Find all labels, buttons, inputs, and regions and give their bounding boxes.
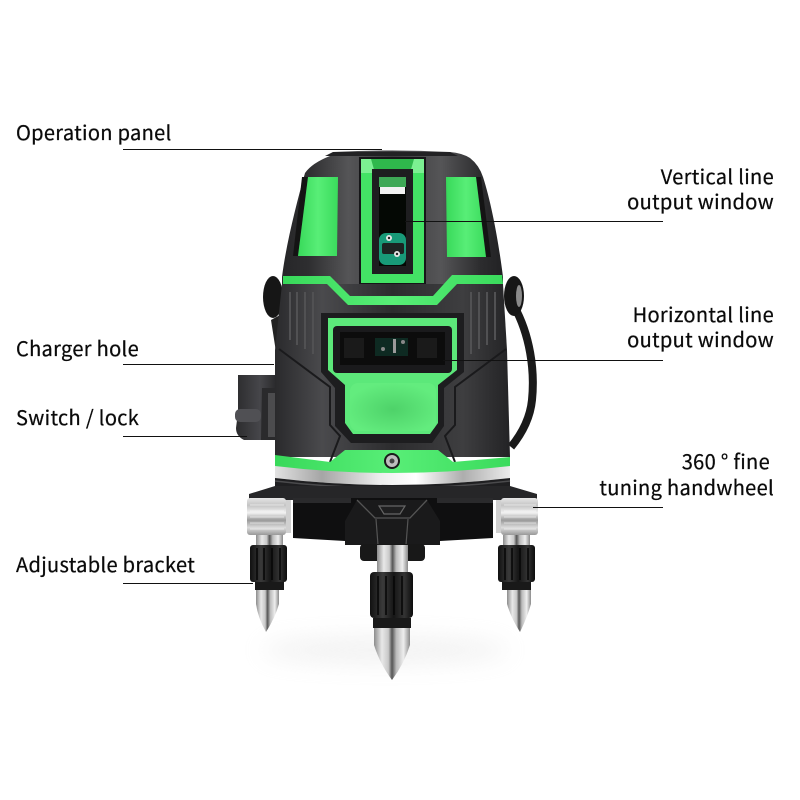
teal adjustment module xyxy=(379,233,406,265)
screw xyxy=(384,453,400,469)
left knob xyxy=(263,276,283,352)
base bar xyxy=(293,498,493,545)
laser level device xyxy=(235,150,538,680)
left knurled handwheel xyxy=(247,498,291,535)
switch lock block xyxy=(235,375,276,440)
label: switch / lock: Switch / lock xyxy=(16,402,139,431)
right knurled handwheel xyxy=(496,498,538,535)
label: horizontal line output window: Horizontal line xyxy=(633,299,774,328)
center bracket xyxy=(345,500,440,545)
right knob xyxy=(504,276,524,316)
center foot xyxy=(370,545,413,680)
lower green band xyxy=(275,450,510,474)
center column xyxy=(360,544,425,561)
right green panel xyxy=(446,177,491,257)
upper green band xyxy=(283,275,503,305)
left green panel xyxy=(293,177,338,256)
right foot xyxy=(498,535,535,632)
ribs right xyxy=(471,292,495,354)
label: horizontal line output window xyxy=(443,299,774,360)
floor shadow xyxy=(260,637,510,663)
label: 360 degree fine tuning handwheel: 360 ° fine xyxy=(682,446,770,475)
horizontal line window xyxy=(333,326,452,373)
cable xyxy=(511,306,533,447)
silver ring xyxy=(275,466,510,485)
upper housing xyxy=(282,150,503,290)
label: vertical line output window: Vertical line xyxy=(661,161,774,190)
label: 360 degree fine tuning handwheel: tuning handwheel xyxy=(599,472,774,501)
label: vertical line output window xyxy=(405,161,774,222)
central front frame xyxy=(321,313,464,443)
label: operation panel: Operation panel xyxy=(16,117,172,146)
label: charger hole: Charger hole xyxy=(16,333,139,362)
dark base ring xyxy=(275,478,510,498)
chamfer edges xyxy=(279,349,340,462)
vertical line window assembly xyxy=(359,157,426,284)
base wings xyxy=(249,486,537,500)
middle housing xyxy=(275,284,510,457)
label: vertical line output window: output window xyxy=(627,186,774,215)
ribs left xyxy=(290,292,313,354)
label: adjustable bracket: Adjustable bracket xyxy=(16,549,195,578)
front green panel xyxy=(328,318,457,434)
label: 360 degree fine tuning handwheel xyxy=(533,446,774,508)
left foot xyxy=(250,535,287,632)
label: horizontal line output window: output window xyxy=(627,324,774,353)
